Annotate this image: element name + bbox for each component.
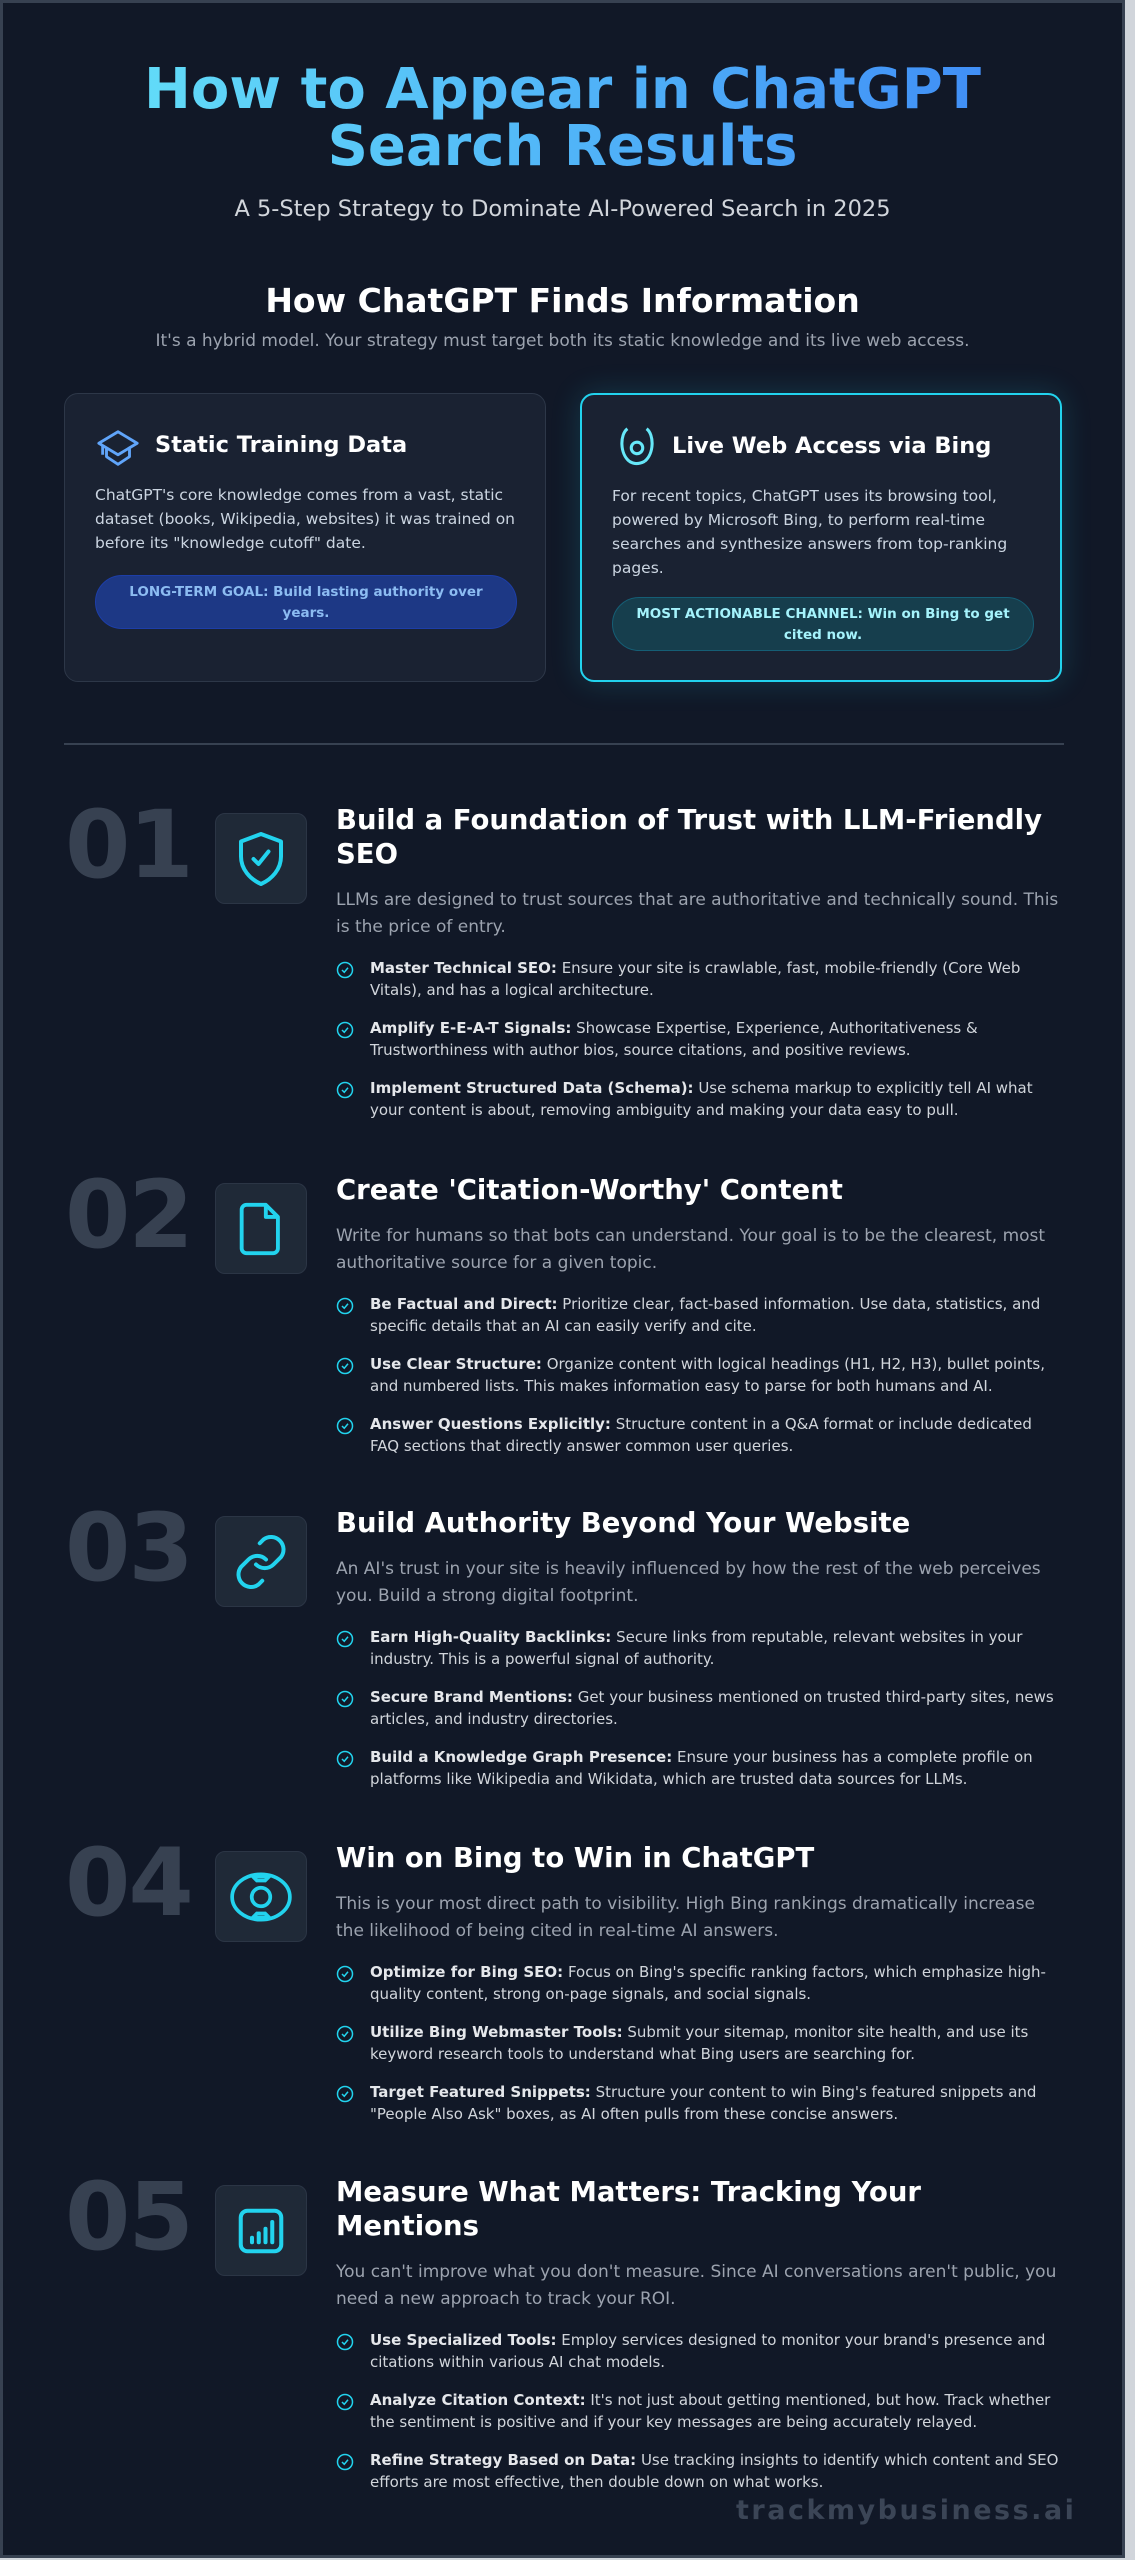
callout pill: LONG-TERM GOAL: Build lasting authority over years.: [129, 584, 483, 621]
content: Measure What Matters: Tracking Your Mentions: [336, 2176, 921, 2242]
panel: live web access: [580, 393, 1062, 682]
icon: bing target: [215, 1851, 307, 1942]
content: Amplify E-E-A-T Signals: Showcase Expertise, Experience, Authoritativeness & Trustworthiness with author bios, source citations, and positive reviews.: [370, 1019, 978, 1059]
content: Master Technical SEO: Ensure your site is crawlable, fast, mobile-friendly (Core Web Vitals), and has a logical architecture.: [370, 959, 1020, 999]
step 02: [65, 1161, 1045, 1455]
content: Refine Strategy Based on Data: Use tracking insights to identify which content and SEO efforts are most effective, then double down on what works.: [370, 2451, 1058, 2491]
content: Secure Brand Mentions: Get your business mentioned on trusted third-party sites, news articles, and industry directories.: [370, 1688, 1054, 1728]
text: For recent topics, ChatGPT uses its browsing tool, powered by Microsoft Bing, to perform real-time searches and synthesize answers from top-ranking pages.: [612, 487, 1007, 577]
footer brand: trackmybusiness.ai: [736, 2495, 1076, 2526]
callout pill: [612, 597, 1034, 651]
step 03: [65, 1494, 1054, 1788]
title: Search Results: [328, 114, 797, 179]
content: Use Specialized Tools: Employ services designed to monitor your brand's presence and citations within various AI chat models.: [370, 2331, 1045, 2371]
content: Use Clear Structure: Organize content with logical headings (H1, H2, H3), bullet points, and numbered lists. This makes information easy to parse for both humans and AI.: [370, 1355, 1045, 1395]
section heading: How ChatGPT Finds Information: [265, 281, 860, 320]
icon: graduation cap: [97, 430, 139, 466]
icon: document: [215, 1183, 307, 1274]
content: Answer Questions Explicitly: Structure content in a Q&A format or include dedicated FAQ sections that directly answer common user queries.: [370, 1415, 1032, 1455]
content: Target Featured Snippets: Structure your content to win Bing's featured snippets and "People Also Ask" boxes, as AI often pulls from these concise answers.: [370, 2083, 1036, 2123]
content: Write for humans so that bots can understand. Your goal is to be the clearest, most authoritative source for a given topic.: [336, 1226, 1045, 1273]
content: Win on Bing to Win in ChatGPT: [336, 1842, 814, 1874]
content: Be Factual and Direct: Prioritize clear, fact-based information. Use data, statistics, and specific details that an AI can easily verify and cite.: [370, 1295, 1040, 1335]
content: Build Authority Beyond Your Website: [336, 1507, 910, 1539]
callout pill: MOST ACTIONABLE CHANNEL: Win on Bing to get cited now.: [636, 606, 1010, 643]
step 05: [65, 2163, 1058, 2491]
number 01: 01: [65, 791, 192, 900]
icon: link: [215, 1516, 307, 1607]
icon: bing: [620, 428, 654, 466]
content: [336, 1842, 1046, 2123]
content: Optimize for Bing SEO: Focus on Bing's specific ranking factors, which emphasize high-quality content, strong on-page signals, and social signals.: [370, 1963, 1046, 2003]
icon: bar chart: [215, 2185, 307, 2276]
panel: static training data: [64, 393, 546, 682]
title: How to Appear in ChatGPT: [144, 57, 981, 122]
callout pill: [95, 575, 517, 629]
step 01: [65, 791, 1058, 1119]
subtitle: A 5-Step Strategy to Dominate AI-Powered Search in 2025: [234, 196, 891, 222]
content: LLMs are designed to trust sources that are authoritative and technically sound. This is the price of entry.: [336, 890, 1058, 937]
number 03: 03: [65, 1494, 192, 1603]
content: You can't improve what you don't measure. Since AI conversations aren't public, you need a new approach to track your ROI.: [336, 2262, 1056, 2309]
text: ChatGPT's core knowledge comes from a vast, static dataset (books, Wikipedia, websites) it was trained on before its "knowledge cutoff" date.: [95, 486, 515, 552]
content: An AI's trust in your site is heavily influenced by how the rest of the web perceives you. Build a strong digital footprint.: [336, 1559, 1041, 1606]
content: [336, 1507, 1054, 1788]
section subheading: It's a hybrid model. Your strategy must target both its static knowledge and its live web access.: [155, 331, 970, 351]
content: [336, 1174, 1045, 1455]
content: Utilize Bing Webmaster Tools: Submit your sitemap, monitor site health, and use its keyword research tools to understand what Bing users are searching for.: [370, 2023, 1028, 2063]
number 05: 05: [65, 2163, 192, 2272]
content: Build a Foundation of Trust with LLM-Friendly SEO: [336, 804, 1042, 870]
content: [336, 804, 1058, 1119]
icon: shield check: [215, 813, 307, 904]
content: Build a Knowledge Graph Presence: Ensure your business has a complete profile on platforms like Wikipedia and Wikidata, which are trusted data sources for LLMs.: [370, 1748, 1033, 1788]
heading: Static Training Data: [155, 432, 407, 458]
content: Implement Structured Data (Schema): Use schema markup to explicitly tell AI what your content is about, removing ambiguity and making your data easy to pull.: [370, 1079, 1033, 1119]
content: Earn High-Quality Backlinks: Secure links from reputable, relevant websites in your industry. This is a powerful signal of authority.: [370, 1628, 1022, 1668]
number 04: 04: [65, 1829, 192, 1938]
heading: Live Web Access via Bing: [672, 433, 991, 459]
number 02: 02: [65, 1161, 192, 1270]
content: Analyze Citation Context: It's not just about getting mentioned, but how. Track whether the sentiment is positive and if your key messages are being accurately relayed.: [370, 2391, 1050, 2431]
content: This is your most direct path to visibility. High Bing rankings dramatically increase the likelihood of being cited in real-time AI answers.: [336, 1894, 1035, 1941]
content: [336, 2176, 1058, 2491]
content: Create 'Citation-Worthy' Content: [336, 1174, 843, 1206]
title: [3, 61, 1122, 175]
step 04: [65, 1829, 1046, 2123]
